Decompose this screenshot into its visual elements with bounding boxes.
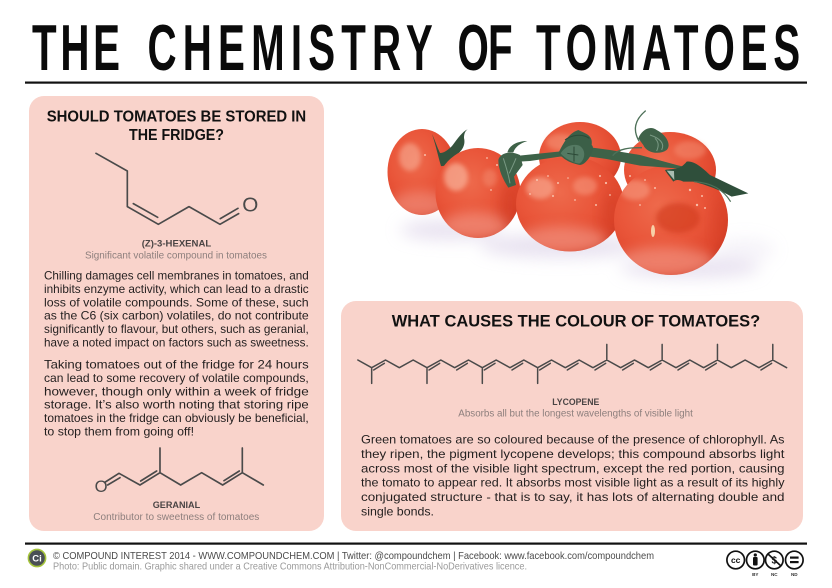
icon: Creative Commons licence badges: $: [772, 556, 778, 566]
icon: Creative Commons licence badges: NC: [771, 572, 778, 577]
heading: WHAT CAUSES THE COLOUR OF TOMATOES?: [392, 312, 760, 331]
centre calyx: [559, 130, 593, 165]
text block: chlorophyll and lycopene: the tomato to appear red. It absorbs most visible light as a result of its highly: [361, 476, 785, 490]
label: lycopene: [458, 397, 693, 420]
credit text: [53, 551, 654, 572]
text block: chilling damage: loss of volatile compounds. Some of these, such: [44, 295, 309, 309]
left calyx: [498, 153, 523, 188]
soft shadow: [400, 220, 775, 278]
text block: recovery out of the fridge: can lead to some recovery of volatile compounds,: [44, 371, 309, 385]
label: (Z)-3-hexenal: Significant volatile compound in tomatoes: [85, 250, 267, 261]
footer: [28, 549, 803, 577]
tomato: front right: [614, 165, 731, 277]
text block: recovery out of the fridge: tomatoes in the fridge can obviously be beneficial,: [44, 411, 309, 425]
icon: Compound Interest logo: [28, 549, 46, 567]
panel background: [29, 96, 324, 531]
vine and calyxes: [498, 111, 748, 202]
label: lycopene: LYCOPENE: [552, 397, 600, 408]
text block: recovery out of the fridge: storage. It’s also worth noting that storing ripe: [44, 398, 309, 412]
text block: chilling damage: [44, 269, 309, 349]
label: geranial: GERANIAL: [153, 500, 200, 511]
icon: Creative Commons licence badges: BY: [752, 572, 758, 577]
back right calyx: [635, 111, 645, 141]
text block: recovery out of the fridge: however, though only within a week of fridge: [44, 384, 309, 398]
heading: SHOULD TOMATOES BE STORED IN: [47, 109, 306, 126]
text block: chilling damage: significantly to flavour, but others, such as geranial,: [44, 322, 309, 336]
tomato: front centre: [516, 156, 624, 254]
icon: Creative Commons licence badges: cc: [731, 555, 741, 565]
text block: chlorophyll and lycopene: Green tomatoes are so coloured because of the presence of chlorophyll. As: [361, 433, 785, 447]
photo: tomatoes on the vine: [388, 111, 775, 278]
chemical structure: geranial: O: [95, 477, 108, 496]
text block: chlorophyll and lycopene: conjugated structure - that is to say, it has lots of alternating double and: [361, 490, 784, 504]
title: THE: [32, 12, 120, 84]
text block: recovery out of the fridge: [44, 358, 309, 438]
label: geranial: [93, 500, 259, 523]
credit text: Photo: Public domain. Graphic shared under a Creative Commons Attribution-NonCommercial-NoDerivatives licence.: [53, 562, 527, 572]
title: [32, 12, 800, 84]
text block: chilling damage: as the C6 (six carbon) volatiles, do not contribute: [44, 309, 309, 323]
tomato: far left: [388, 129, 450, 215]
panel: what causes the colour of tomatoes: [341, 301, 803, 531]
water droplets: [424, 154, 706, 209]
text block: chlorophyll and lycopene: single bonds.: [361, 504, 434, 518]
chemical structure: (Z)-3-hexenal: O: [242, 193, 258, 216]
calyx: far left tomato: [432, 129, 468, 166]
tomato: back right: [624, 132, 716, 208]
text block: recovery out of the fridge: Taking tomatoes out of the fridge for 24 hours: [44, 358, 309, 372]
icon: Compound Interest logo: Ci: [32, 554, 42, 564]
text block: chlorophyll and lycopene: they ripen, the pigment lycopene develops; this compound absorbs light: [361, 447, 785, 461]
heading: [47, 109, 306, 144]
heading: THE FRIDGE?: [129, 127, 224, 144]
panel background: [341, 301, 803, 531]
text block: chilling damage: inhibits enzyme activity, which can lead to a drastic: [44, 282, 309, 296]
title: TOMATOES: [536, 12, 800, 84]
tomato: second from left: [436, 148, 520, 240]
text block: chilling damage: have a noted impact on factors such as sweetness.: [44, 335, 309, 349]
chemical structure: lycopene: [358, 344, 787, 383]
right calyx and vine tip: [665, 161, 748, 197]
credit text: © COMPOUND INTEREST 2014 - WWW.COMPOUNDCHEM.COM | Twitter: @compoundchem | Facebook: www.facebook.com/compoundchem: [53, 551, 654, 562]
title: OF: [458, 12, 513, 84]
text block: recovery out of the fridge: to stop them from going off!: [44, 424, 194, 438]
text block: chilling damage: Chilling damages cell membranes in tomatoes, and: [44, 269, 309, 283]
label: geranial: Contributor to sweetness of tomatoes: [93, 512, 259, 523]
main vine: [519, 147, 690, 171]
label: lycopene: Absorbs all but the longest wavelengths of visible light: [458, 409, 693, 420]
label: (Z)-3-hexenal: (Z)-3-HEXENAL: [142, 239, 211, 250]
chemical structure: (Z)-3-hexenal: [96, 153, 258, 224]
tomato: back centre: [539, 122, 621, 192]
panel: should tomatoes be stored in the fridge: [29, 96, 324, 531]
icon: Creative Commons licence badges: ND: [791, 572, 798, 577]
text block: chlorophyll and lycopene: across most of the visible light spectrum, except the red portion, causing: [361, 461, 784, 475]
text block: chlorophyll and lycopene: [361, 433, 785, 518]
title: CHEMISTRY: [148, 12, 433, 84]
label: (Z)-3-hexenal: [85, 239, 267, 261]
chemical structure: geranial: [95, 448, 263, 496]
icon: Creative Commons licence badges: [727, 551, 803, 577]
